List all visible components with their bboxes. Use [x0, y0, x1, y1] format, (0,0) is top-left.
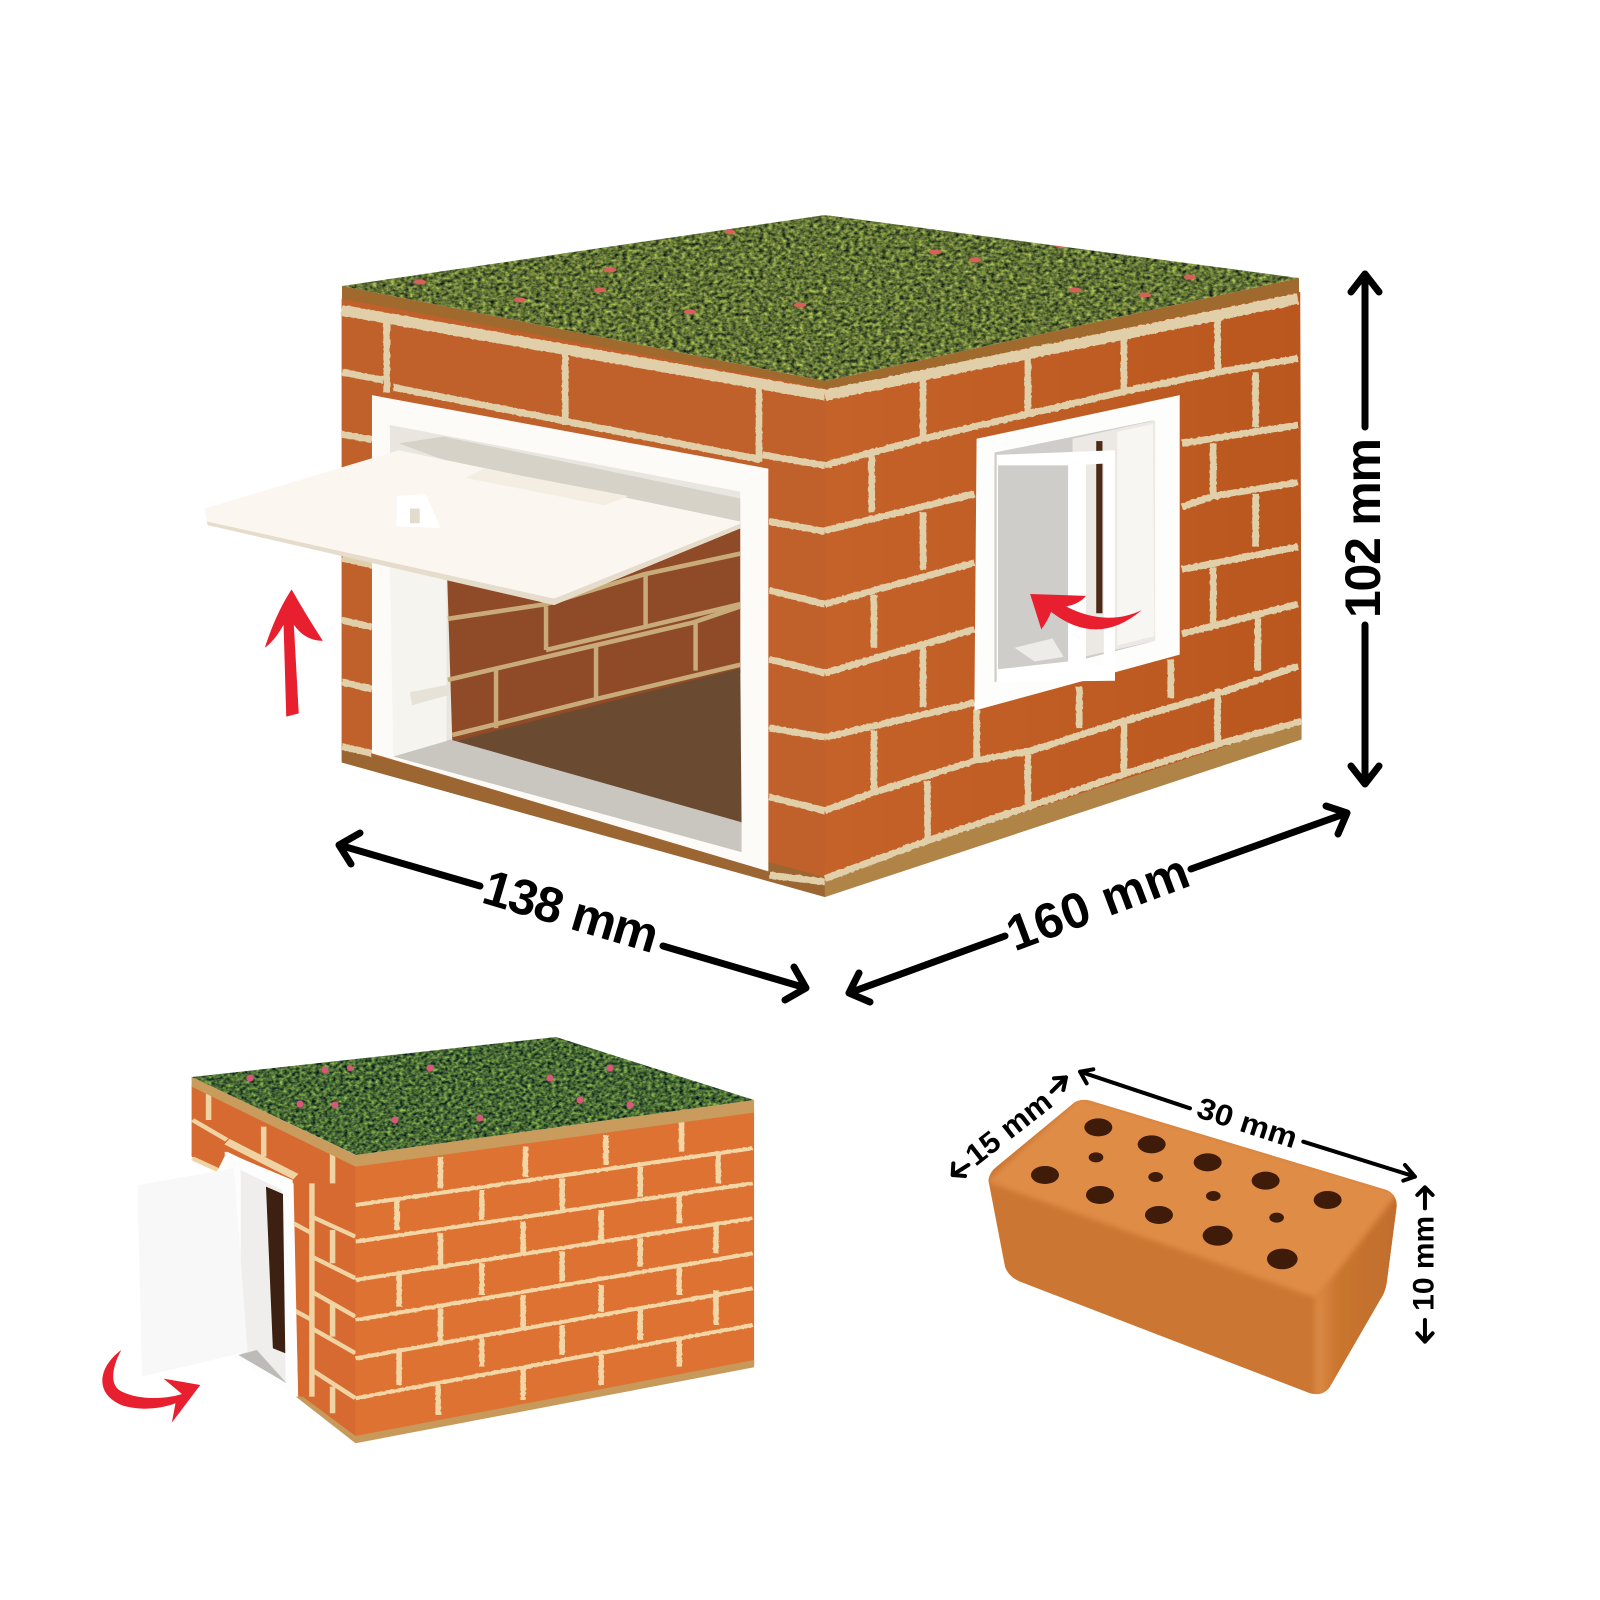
- dimension: 138 mm: 138 mm: [477, 859, 665, 964]
- flap handle: [397, 494, 441, 528]
- lifted flap door: [205, 436, 740, 605]
- red arrow: flap lifts up: [265, 589, 323, 717]
- brick end face: [1312, 1196, 1397, 1394]
- red arrow: window opens: [1030, 594, 1142, 629]
- right cork base: [825, 721, 1302, 897]
- dimension: 10 mm: [1408, 1187, 1441, 1342]
- small house roof: [190, 1035, 756, 1157]
- dimension: 160 mm: 160 mm: [999, 843, 1196, 962]
- small house left wall: [192, 1085, 356, 1443]
- door frame: [372, 395, 768, 871]
- small house mortar: [356, 1122, 753, 1415]
- red arrow: door swings: [102, 1350, 200, 1423]
- open casement: [997, 450, 1115, 682]
- small door frame: [225, 1152, 298, 1397]
- large house roof: [340, 213, 1302, 400]
- dimension: 30 mm: [1080, 1069, 1415, 1181]
- large house right wall: [825, 292, 1302, 897]
- large house left wall: [205, 299, 825, 897]
- left cork base: [342, 746, 825, 897]
- dimension: 138 mm: [339, 833, 806, 1000]
- dimension: 160 mm: [849, 806, 1347, 1002]
- brick body: [983, 1093, 1407, 1400]
- small door panel: [137, 1168, 248, 1377]
- small cork base: [296, 1360, 754, 1443]
- small house right wall: [356, 1108, 754, 1441]
- single perforated brick: [953, 1069, 1441, 1400]
- large brick house: [205, 213, 1302, 897]
- window: [974, 395, 1180, 711]
- garage opening: [390, 425, 742, 852]
- brick holes: [1031, 1118, 1342, 1269]
- brick top face: [987, 1097, 1398, 1298]
- dimension: 15 mm: 15 mm: [959, 1085, 1059, 1173]
- infographic canvas: [102, 215, 1435, 1444]
- dimension: 30 mm: 30 mm: [1193, 1092, 1301, 1155]
- dimension: 10 mm: 10 mm: [1408, 1216, 1441, 1311]
- dimension: 102 mm: [1335, 274, 1391, 784]
- small brick house: [102, 1077, 754, 1443]
- small house roof edge: [192, 1077, 754, 1167]
- dimension: 102 mm: 102 mm: [1335, 438, 1391, 618]
